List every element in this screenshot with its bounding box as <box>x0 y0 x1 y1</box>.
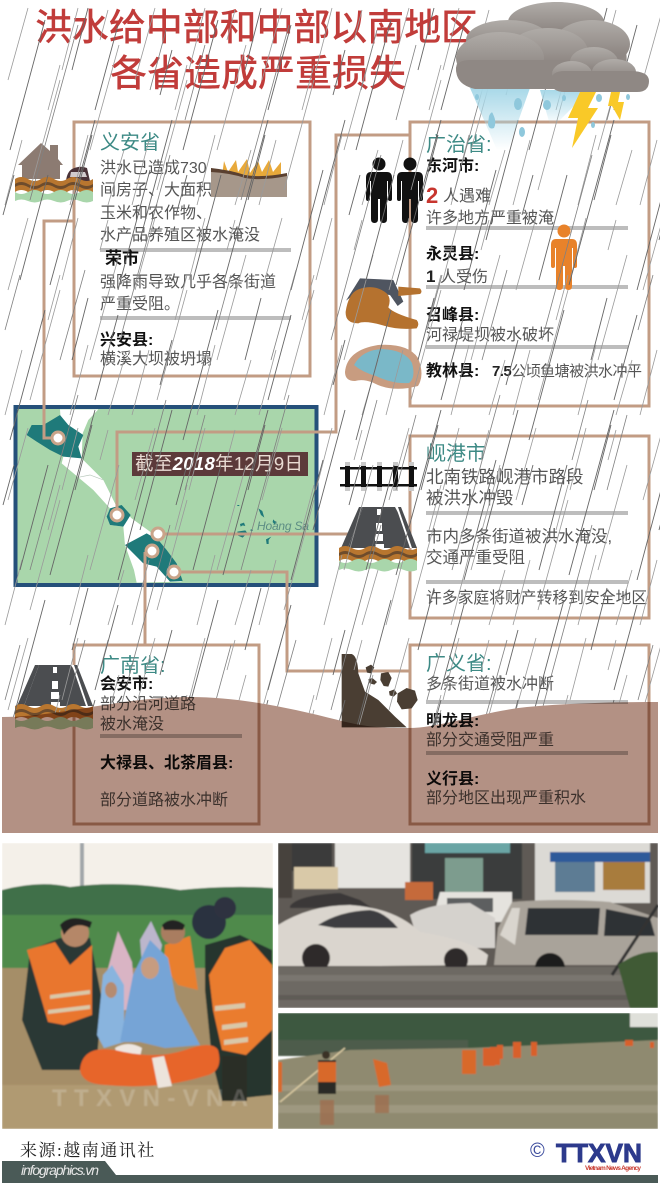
lightning <box>568 92 624 148</box>
panel: Quang Tri <box>410 122 649 406</box>
panel: Nghe An: 强降雨导致几乎各条街道 <box>100 273 276 291</box>
icon: flooded road <box>15 665 93 730</box>
map: land <box>27 409 276 583</box>
panel: Quang Tri: 教林县: <box>426 361 479 380</box>
icon: flooded road <box>339 507 417 572</box>
copyright mark: © <box>530 1140 545 1162</box>
panel: Quang Tri: 东河市: <box>426 156 479 175</box>
icon: storm cloud <box>456 2 649 150</box>
title: 各省造成严重损失 <box>110 53 406 94</box>
panel: Nghe An: 兴安县: <box>100 331 153 349</box>
watermark: TTXVN-VNA <box>52 1085 248 1112</box>
photo: flooded cars <box>278 843 658 1008</box>
panel: Quang Nam: 大禄县、北茶眉县: <box>100 753 233 772</box>
icon: flooded house <box>15 143 93 202</box>
footer website: infographics.vn <box>21 1162 99 1178</box>
panel: Nghe An: 水产品养殖区被水淹没 <box>100 226 260 244</box>
footer bar <box>2 1161 658 1183</box>
panel: Quang Nam: 部分沿河道路 <box>100 695 196 713</box>
cloud: small <box>551 47 649 92</box>
panel: Quang Ngai: 义行县: <box>426 770 479 788</box>
panel: Quang Tri: 召峰县: <box>426 306 479 324</box>
icon: railway <box>340 462 417 491</box>
panel: Quang Ngai: 广义省: <box>426 652 492 675</box>
panel: Quang Tri: 永灵县: <box>426 245 479 263</box>
panel: Da Nang: 交通严重受阻 <box>426 548 525 567</box>
icon: fish pond <box>345 345 422 389</box>
cloud: large <box>456 2 630 89</box>
icon: landslide <box>342 654 418 727</box>
source credit: 来源:越南通讯社 <box>20 1141 156 1160</box>
rain drops <box>470 88 630 150</box>
date label: 截至2018年12月9日 <box>135 453 303 474</box>
pink raincoat <box>107 930 134 1011</box>
panel: Quang Tri: 1 <box>426 267 435 286</box>
panel: Nghe An: 横溪大坝被坍塌 <box>100 350 212 368</box>
panel: Quang Tri: 河禄堤坝被水破坏 <box>426 326 554 344</box>
panel: Quang Ngai: 明龙县: <box>426 712 479 730</box>
photo: rescue boat <box>2 843 273 1129</box>
panel: map <box>16 407 316 585</box>
panel: Quang Ngai: 部分交通受阻严重 <box>426 731 554 749</box>
rain overlay <box>2 8 660 726</box>
blue raincoats <box>97 965 124 1048</box>
icon: broken dam <box>346 278 421 329</box>
photo: rescuers in water <box>278 1013 658 1129</box>
man: left <box>22 938 102 1070</box>
panel: Da Nang: 被洪水冲毁 <box>426 488 514 508</box>
connector lines <box>44 135 410 671</box>
panel: Quang Tri: 许多地方严重被淹 <box>426 209 554 227</box>
panel: Quang Tri: 人受伤 <box>440 268 488 286</box>
panel: Nghe An: 义安省 <box>100 131 160 154</box>
panel: Quang Tri: 7.5公顷鱼塘被洪水冲平 <box>492 362 642 380</box>
panel: Nghe An: 玉米和农作物、 <box>100 204 212 222</box>
title <box>35 7 478 94</box>
panel: Nghe An: 严重受阻。 <box>100 295 180 313</box>
man: right <box>205 935 272 1100</box>
panel: Da Nang: 北南铁路岘港市路段 <box>426 467 584 487</box>
panel: Quang Tri: 广治省: <box>426 133 492 156</box>
panel: Quang Nam: 部分道路被水冲断 <box>100 791 228 809</box>
map: Hoàng Sa label: Hoàng Sa <box>257 519 309 533</box>
panel: Quang Nam: 被水淹没 <box>100 715 164 733</box>
panel: Quang Nam <box>74 645 259 824</box>
logo: TTXVN <box>530 1138 642 1172</box>
panel: Quang Tri: 人遇难 <box>443 187 491 205</box>
panel: Quang Ngai <box>410 645 649 824</box>
man: middle <box>164 936 198 990</box>
panel: Da Nang: 岘港市 <box>426 442 486 465</box>
raft <box>80 1045 219 1086</box>
flood water <box>2 697 658 833</box>
panel: Quang Nam: 广南省: <box>100 654 166 677</box>
wordmark: TTXVN <box>556 1138 642 1168</box>
panel: Quang Tri: 2 <box>426 183 438 208</box>
title: 洪水给中部和中部以南地区 <box>35 7 478 48</box>
panel: Quang Ngai: 多条街道被水冲断 <box>426 675 554 693</box>
tagline: Vietnam News Agency <box>585 1165 641 1172</box>
panel: Quang Nam: 会安市: <box>100 674 153 693</box>
panel: Nghe An: 洪水已造成730 <box>100 159 207 177</box>
icon: two people <box>366 158 423 223</box>
icon: injured person <box>551 224 577 290</box>
panel: Da Nang: 市内多条街道被洪水淹没, <box>426 527 612 546</box>
panel: Quang Ngai: 部分地区出现严重积水 <box>426 789 586 807</box>
panel: Da Nang: 许多家庭将财产转移到安全地区 <box>426 589 647 607</box>
panel: Da Nang <box>410 436 649 618</box>
map pins <box>52 432 180 578</box>
panel: Nghe An: 间房子、大面积 <box>100 181 212 199</box>
icon: flooded crops <box>211 159 287 197</box>
panel: Nghe An: 荣市 <box>105 248 139 268</box>
panel: Nghe An <box>74 122 310 376</box>
